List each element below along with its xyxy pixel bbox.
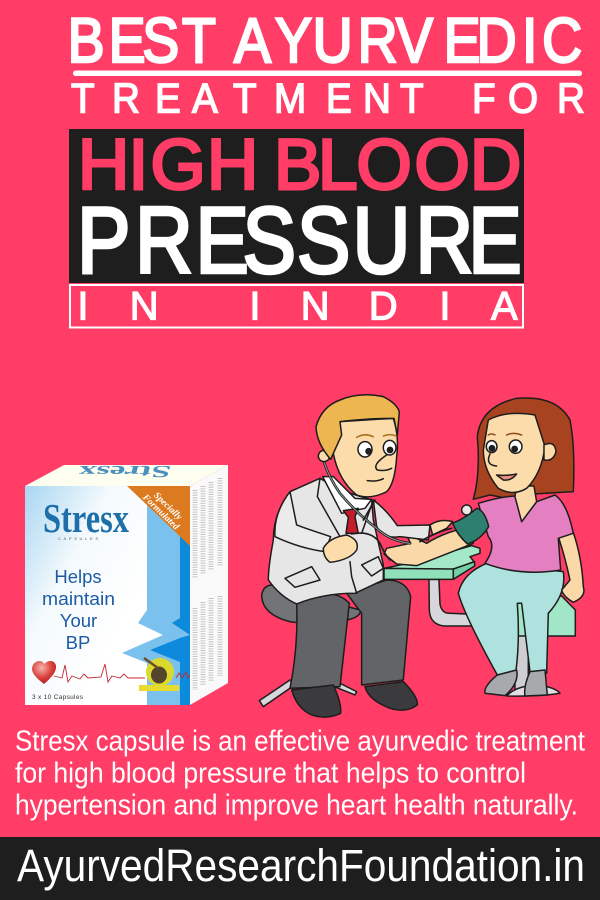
orange corner banner: Formulated: [139, 492, 181, 532]
orange corner banner: [127, 486, 190, 546]
framed label: in india: IN INDIA: [77, 284, 518, 328]
description text: [15, 726, 585, 822]
box side face: [190, 465, 228, 705]
title: best ayurvedic: BEST AYURVEDIC: [68, 5, 582, 76]
box claim text: [42, 566, 115, 653]
footer bar: [0, 837, 600, 900]
doctor left sleeve: [275, 492, 331, 552]
doctor trousers: [347, 580, 411, 685]
box claim text: Your: [60, 610, 97, 631]
patient chair: [499, 596, 575, 696]
patient hair: [473, 398, 574, 503]
patient ear: [544, 443, 556, 460]
product box: Stresx capsules: [25, 462, 228, 705]
red tie: [343, 508, 358, 533]
doctor shirt collar: [323, 477, 372, 513]
heading panel: high blood pressure: [69, 126, 524, 293]
patient resting arm: [558, 533, 584, 602]
description text: for high blood pressure that helps to control: [15, 758, 526, 790]
heading: high blood: HIGH BLOOD: [78, 126, 521, 205]
pack size text: 3 x 10 Capsules: [32, 694, 84, 701]
doctor right sleeve: [373, 500, 430, 540]
doctor coat: [268, 478, 383, 604]
patient extended arm: [384, 527, 473, 566]
doctor eyes: [357, 435, 396, 457]
doctor shoes: [292, 685, 341, 717]
box front face: [25, 486, 190, 705]
illustration: doctor measuring patient's blood pressure: [259, 395, 584, 717]
patient top: [478, 495, 573, 572]
patient: [384, 398, 584, 696]
box top face: [25, 462, 228, 486]
stethoscope: [323, 460, 452, 560]
doctor stool: [259, 585, 361, 707]
patient shoes: [485, 670, 547, 696]
brand logo: CAPSULES: [58, 536, 98, 541]
title underline: [73, 70, 582, 76]
box top face: Stresx: [76, 462, 173, 481]
ECG line: [54, 664, 190, 682]
heading: pressure: PRESSURE: [77, 188, 522, 293]
doctor hand with bulb: [323, 535, 357, 562]
patient nose and mouth: [488, 454, 517, 480]
doctor hair: [316, 395, 399, 459]
quality badge: [139, 658, 179, 691]
box claim text: Helps: [54, 566, 102, 587]
patient face: [483, 413, 545, 492]
icon: heart: [32, 661, 56, 684]
doctor nose and mouth: [367, 455, 392, 481]
doctor hand on cuff: [430, 521, 453, 535]
box claim text: maintain: [42, 588, 115, 609]
treatment table stand: [429, 579, 472, 626]
subtitle: treatment for: TREATMENT FOR: [71, 74, 585, 122]
patient eyes: [486, 433, 522, 453]
doctor ear: [318, 450, 330, 462]
doctor: [268, 395, 453, 717]
orange corner banner: Specially: [151, 491, 184, 523]
patient trousers: [458, 563, 564, 675]
treatment table: [384, 546, 480, 579]
patient neck: [515, 486, 537, 522]
brand logo: Stresx: [43, 495, 129, 541]
box claim text: BP: [66, 632, 90, 653]
blue zigzag band: [122, 486, 190, 705]
doctor head: [332, 418, 397, 497]
blood pressure cuff: [453, 505, 489, 544]
doctor coat details: [285, 478, 383, 593]
